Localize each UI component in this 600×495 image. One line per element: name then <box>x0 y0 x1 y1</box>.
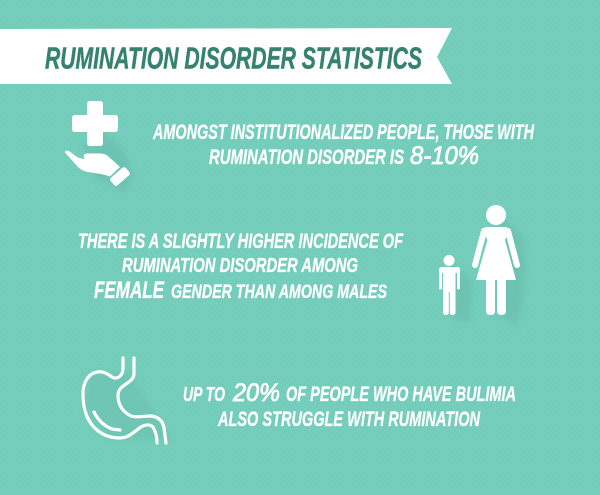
text block: institutionalized people: RUMINATION DISORDER IS <box>209 146 404 169</box>
icon: sleeve cuff <box>109 166 131 187</box>
icon: medical cross <box>72 101 118 146</box>
icon: open hand <box>64 151 120 176</box>
text block: bulimia statistic: UP TO <box>183 384 225 406</box>
text block: female gender incidence: THERE IS A SLIGHTLY HIGHER INCIDENCE OF <box>78 230 404 253</box>
text block: female gender incidence: GENDER THAN AMONG MALES <box>171 282 387 303</box>
text block: bulimia statistic <box>183 379 516 431</box>
text block: institutionalized people <box>152 121 535 170</box>
title: RUMINATION DISORDER STATISTICS <box>45 40 422 76</box>
icon: woman and child <box>439 205 526 325</box>
title ribbon <box>0 28 452 84</box>
icon: stomach <box>83 358 172 443</box>
text block: bulimia statistic: 20% <box>232 379 280 407</box>
text block: female gender incidence: FEMALE <box>94 277 165 304</box>
text block: institutionalized people: 8-10% <box>410 142 479 170</box>
icon: hand holding medical cross <box>64 101 134 194</box>
text block: bulimia statistic: ALSO STRUGGLE WITH RUMINATION <box>217 408 481 431</box>
icon: child figure <box>439 255 460 315</box>
text block: female gender incidence <box>78 230 404 304</box>
text block: female gender incidence: RUMINATION DISORDER AMONG <box>122 255 358 277</box>
icon: woman figure <box>475 205 517 315</box>
